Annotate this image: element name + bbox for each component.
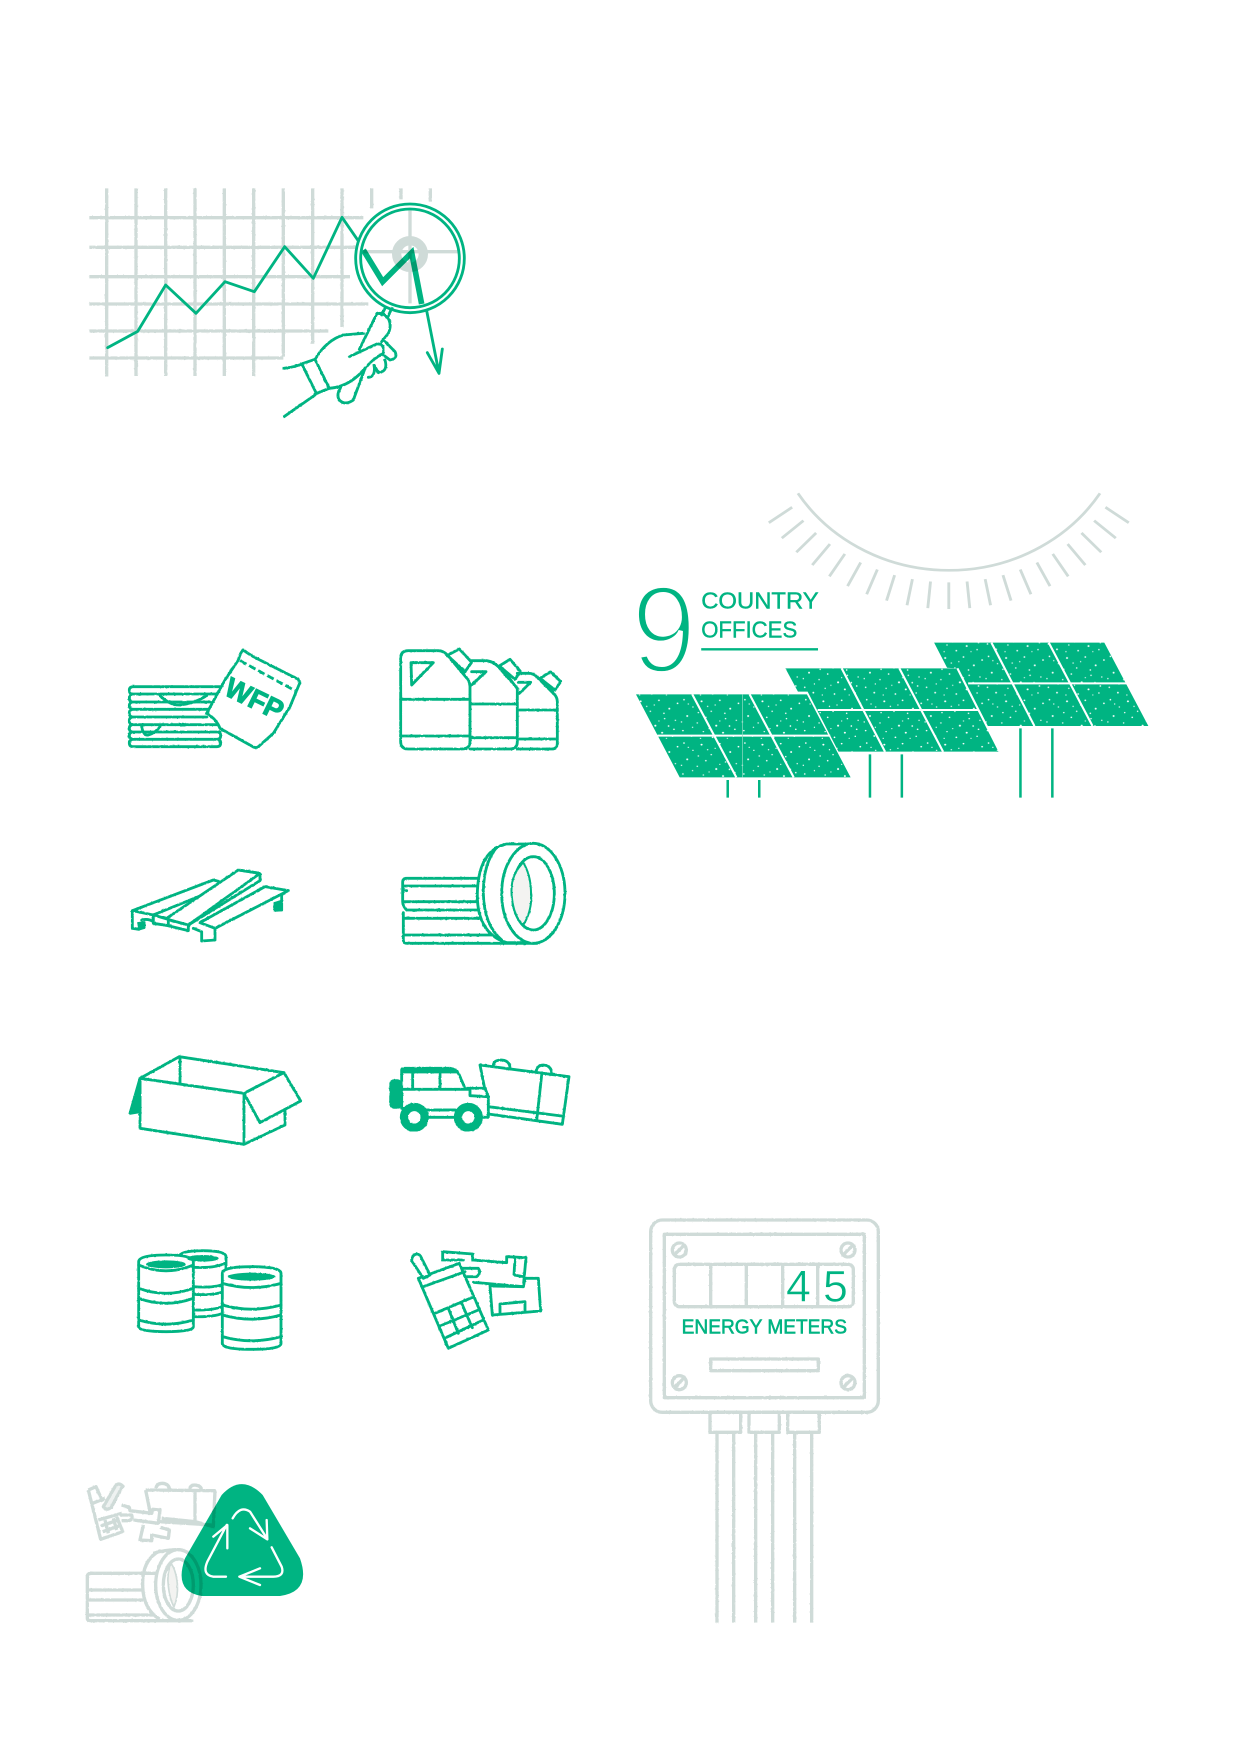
panel: recycling	[87, 1483, 303, 1621]
panel: supply icons top row	[129, 649, 565, 943]
recycling arrows	[205, 1509, 282, 1585]
heading: country offices	[701, 588, 819, 643]
icon: food bags	[129, 650, 300, 748]
solar panel: back	[916, 643, 1148, 752]
meter reading 45: 4	[786, 1263, 811, 1312]
panel: supply icons lower rows	[130, 1057, 569, 1349]
icon: vehicle and generator	[391, 1060, 569, 1128]
trend line	[108, 217, 360, 348]
icon: fuel drums	[139, 1251, 281, 1349]
meter reading 45: 5	[823, 1263, 848, 1312]
heading: country offices: COUNTRY	[701, 588, 819, 614]
hand holding magnifier	[284, 308, 396, 417]
downward arrow	[427, 311, 442, 373]
panel: market chart with magnifier	[89, 188, 465, 417]
panel: energy meter	[651, 1220, 878, 1623]
big number 9: 9	[631, 561, 696, 699]
meter housing	[651, 1220, 878, 1412]
solar panel: middle	[785, 668, 1000, 777]
label: energy meters: ENERGY METERS	[682, 1315, 847, 1338]
chart grid	[89, 188, 430, 376]
magnifying glass lens	[355, 203, 465, 313]
sun	[769, 493, 1129, 609]
connectors and wires	[710, 1412, 819, 1623]
icon: tyres	[403, 843, 565, 943]
heading: country offices: OFFICES	[701, 617, 797, 643]
heading underline	[701, 646, 818, 653]
icon: pallet	[132, 870, 288, 941]
panel: solar panels and sun	[631, 493, 1148, 798]
icon: radio and tools	[412, 1252, 541, 1348]
meter reading 45	[786, 1263, 848, 1312]
faded recycled items	[87, 1483, 215, 1621]
icon: jerry cans	[401, 649, 561, 749]
solar panel legs	[728, 728, 1052, 798]
icon: cardboard box	[130, 1057, 301, 1144]
bag label: WFP: WFP	[220, 672, 289, 726]
solar panel: front	[636, 694, 851, 777]
recycling triangle	[182, 1484, 303, 1596]
